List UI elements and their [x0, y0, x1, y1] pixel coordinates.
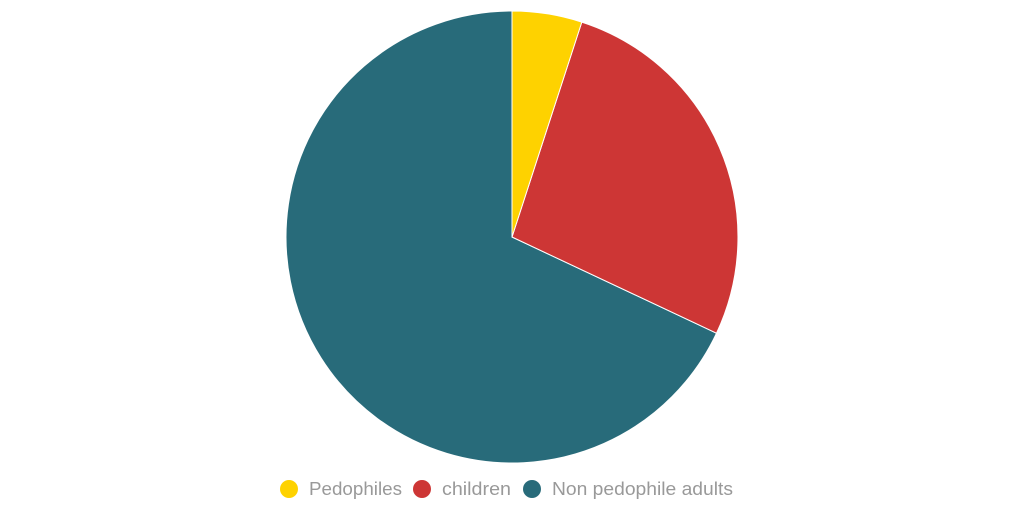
legend item: children: children [442, 479, 511, 499]
slice: children [512, 22, 738, 333]
legend item: Non pedophile adults: Non pedophile adults [552, 479, 733, 499]
pie chart [286, 11, 738, 463]
legend [280, 479, 733, 499]
legend item: children [413, 479, 511, 499]
legend item: Pedophiles: Pedophiles [309, 479, 402, 499]
slice: Non pedophile adults [286, 11, 716, 463]
slice: Pedophiles [512, 11, 582, 237]
